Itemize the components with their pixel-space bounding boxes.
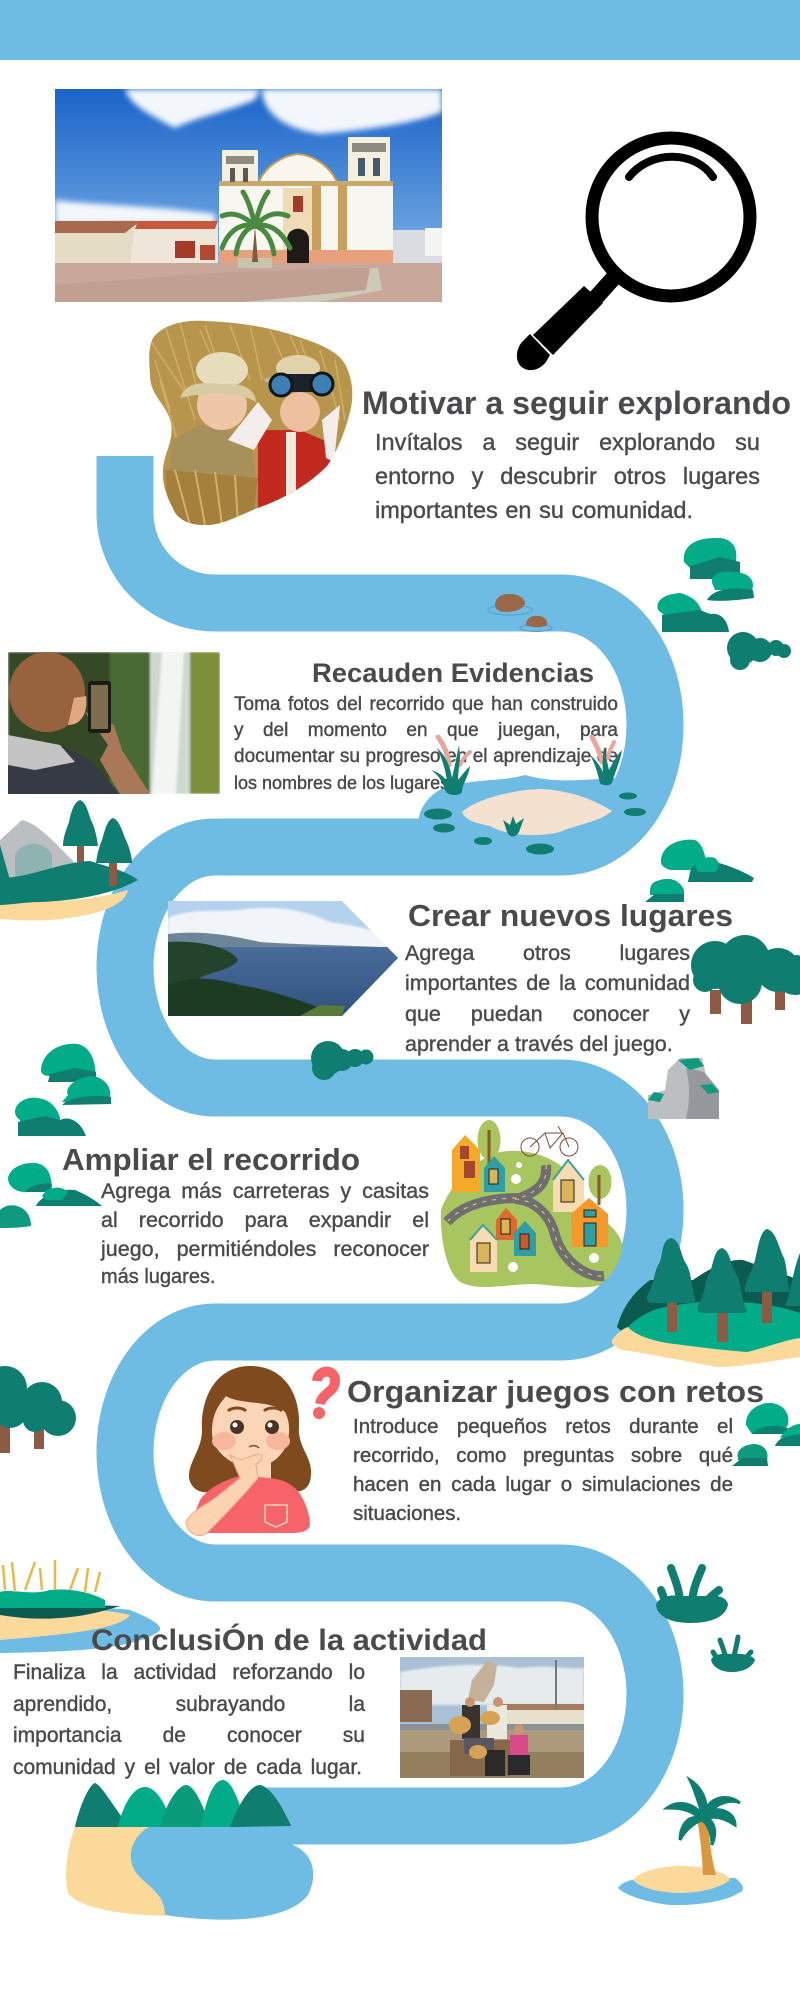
text: Organizar body: recorrido, como preguntas sobre qué bbox=[353, 1444, 733, 1467]
text: Conclusión body: comunidad y el valor de cada lugar. bbox=[13, 1756, 362, 1779]
text: Organizar body: Introduce pequeños retos durante el bbox=[353, 1415, 733, 1438]
forest island right bbox=[612, 1229, 800, 1367]
capybaras in river bbox=[488, 594, 552, 632]
bush on river bbox=[311, 1041, 374, 1080]
text: Motivar body: importantes en su comunidad. bbox=[375, 497, 693, 523]
text: Ampliar body: al recorrido para expandir el bbox=[101, 1208, 429, 1232]
bush lower right large bbox=[656, 1568, 728, 1623]
pond with island bbox=[418, 770, 650, 854]
kids with binoculars photo bbox=[145, 318, 357, 528]
lake photo bbox=[168, 901, 400, 1016]
text: Organizar body bbox=[353, 1415, 733, 1525]
text: Ampliar body: Agrega más carreteras y casitas bbox=[101, 1179, 429, 1203]
final pond and beach bbox=[66, 1780, 313, 1920]
trees left bbox=[0, 1366, 76, 1453]
text: Crear body: Agrega otros lugares bbox=[405, 941, 690, 965]
text: Recauden body: documentar su progreso en el aprendizaje de bbox=[234, 746, 618, 767]
text: Ampliar body: más lugares. bbox=[101, 1266, 216, 1288]
text: Conclusión body: aprendido, subrayando la bbox=[13, 1693, 365, 1716]
river path bbox=[125, 456, 655, 1816]
left island with mountain and trees bbox=[0, 800, 138, 920]
text: Recauden body: Toma fotos del recorrido que han construido bbox=[234, 694, 618, 715]
text: Motivar body: Invítalos a seguir explorando su bbox=[375, 429, 760, 455]
text: Organizar body: hacen en cada lugar o simulaciones de bbox=[353, 1473, 733, 1496]
bushes right of river middle bbox=[645, 840, 754, 902]
text: Crear body: que puedan conocer y bbox=[405, 1002, 690, 1026]
bushes upper right bbox=[657, 538, 791, 670]
text: Ampliar body bbox=[100, 1179, 429, 1288]
text: Recauden body: los nombres de los lugares. bbox=[234, 773, 454, 793]
text: Organizar body: situaciones. bbox=[353, 1502, 461, 1525]
bush lower right small bbox=[711, 1637, 755, 1672]
text: Crear body: aprender a través del juego. bbox=[405, 1032, 673, 1056]
text: Conclusión body: importancia de conocer su bbox=[13, 1724, 365, 1747]
text: Motivar body bbox=[375, 429, 760, 524]
bushes beside Ampliar bbox=[0, 1163, 102, 1228]
wheat island left bbox=[0, 1560, 160, 1653]
text: Recauden body bbox=[234, 694, 618, 794]
top banner bbox=[0, 0, 800, 60]
musicians photo bbox=[400, 1657, 584, 1778]
phone waterfall photo bbox=[8, 652, 220, 794]
church photo bbox=[55, 89, 442, 302]
thinking girl bbox=[186, 1366, 311, 1536]
heading: Recauden Evidencias: Recauden Evidencias bbox=[312, 658, 594, 688]
text: Conclusión body bbox=[13, 1661, 366, 1779]
heading: Ampliar el recorrido: Ampliar el recorrido bbox=[62, 1142, 360, 1177]
heading: Organizar juegos con retos: Organizar juegos con retos bbox=[347, 1374, 764, 1409]
trees right bbox=[691, 935, 800, 1024]
text: Conclusión body: Finaliza la actividad reforzando lo bbox=[13, 1661, 365, 1684]
heading: Conclusión de la actividad: ConclusiÓn de la actividad bbox=[91, 1623, 487, 1657]
bushes right of Organizar bbox=[732, 1403, 800, 1466]
question mark icon bbox=[316, 1372, 335, 1416]
rock bbox=[648, 1058, 719, 1119]
village illustration bbox=[441, 1120, 622, 1287]
heading: Motivar a seguir explorando: Motivar a seguir explorando bbox=[362, 385, 791, 421]
palm island bbox=[618, 1780, 743, 1905]
magnifying glass icon bbox=[517, 138, 750, 370]
text: Ampliar body: juego, permitiéndoles reconocer bbox=[101, 1237, 429, 1261]
text: Recauden body: y del momento en que juegan, para bbox=[234, 720, 618, 741]
text: Crear body bbox=[404, 941, 690, 1056]
text: Crear body: importantes de la comunidad bbox=[405, 971, 690, 995]
bushes left middle bbox=[15, 1044, 111, 1136]
text: Motivar body: entorno y descubrir otros lugares bbox=[375, 463, 760, 489]
heading: Crear nuevos lugares: Crear nuevos lugares bbox=[408, 898, 733, 933]
